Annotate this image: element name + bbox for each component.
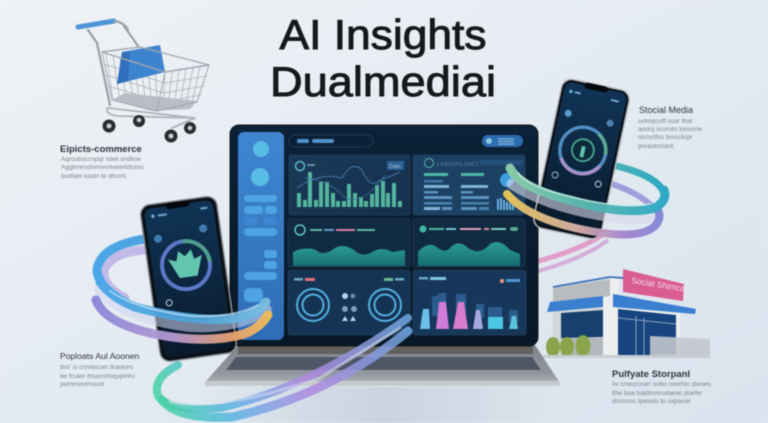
store sign [623, 269, 686, 301]
text block: private storefront: Pulfyate Storpanl [612, 369, 690, 380]
store lower wall [553, 305, 603, 356]
store upper wall [553, 279, 610, 304]
mini bars [497, 198, 514, 210]
title: AI Insights [280, 11, 486, 58]
text block: private storefront: dnsoonc tpeoslo to oxpaoar. [612, 398, 692, 405]
pink ribbon tail behind right phone [535, 234, 604, 262]
ribbon: back of right ring [612, 165, 665, 215]
panel: gauges [288, 270, 410, 335]
text block: e-commerce: Agginnirsdsmonnivwertdciosi [61, 164, 143, 171]
cart basket floor [112, 93, 197, 111]
cart load: blue folder [117, 45, 165, 84]
icon: storefront [543, 269, 710, 358]
text block: social media: uoknpcoff soar that [638, 118, 692, 125]
cart chassis [107, 108, 195, 128]
ribbon: right phone ring [507, 168, 665, 235]
text block: social media: Stocial Media [639, 105, 693, 115]
panel: bar and line chart [289, 155, 410, 215]
text block: e-commerce: Aqroobsccnpqr rdeit ondtioe [61, 156, 141, 163]
laptop [205, 125, 560, 386]
panel: data list: 1 KASSTS CRCT [436, 162, 480, 168]
laptop hinge [238, 345, 533, 354]
cart handle [78, 21, 114, 27]
right phone [532, 78, 631, 241]
panel: area chart right [413, 219, 525, 267]
title: Dualmediai [270, 58, 496, 105]
cart basket wires [104, 54, 207, 110]
top search bar [289, 135, 373, 147]
text block: social media: aoorq ocoroto tonoone [638, 126, 703, 133]
icon: shopping cart [78, 21, 209, 142]
laptop lip [205, 381, 560, 386]
store left awning [547, 296, 603, 312]
text block: e-commerce: bodtaei eastn te dtsont. [61, 173, 128, 180]
store right awning [613, 294, 696, 314]
laptop base [205, 345, 560, 386]
text block: popular AI [60, 351, 140, 388]
ribbon: sweep across laptop [157, 318, 408, 417]
text block: social media: preastoctarit. [638, 143, 675, 150]
top right profile pill [482, 135, 523, 147]
store sign: Sociat Shimca [631, 275, 686, 294]
store left lower panel [561, 338, 603, 355]
phone gauge [159, 238, 213, 292]
ribbon: left phone ring [96, 282, 268, 339]
phone ring gauge [556, 123, 610, 177]
panel: area chart left [288, 219, 410, 267]
text block: e-commerce: Eipicts-commerce [60, 144, 142, 155]
panel: bar and line chart: Dato [389, 164, 401, 170]
phone mascot icon [167, 248, 205, 279]
left phone [139, 195, 238, 363]
panel: pink and cyan bars [413, 270, 526, 335]
sidebar [238, 132, 284, 340]
text block: social media [638, 105, 703, 150]
trend lines [297, 166, 400, 188]
pink ribbon tail, second strand [535, 240, 608, 272]
store white column [603, 278, 618, 357]
text block: popular AI: Poploats Aul Aoonen [60, 351, 140, 361]
text block: private storefront: Iiv cmecrorarr oobo noorhic dieoes. [612, 381, 712, 388]
text block: private storefront: lthe baa baldtmnrudaeac plarfer [612, 390, 703, 397]
phone center icon [570, 137, 596, 163]
text block: social media: oicrorthis bmsclicpr [638, 134, 694, 141]
text block: popular AI: peirtesoornsuot [60, 381, 104, 388]
text block: popular AI: be frsaer ihsacortoqupinhc [60, 373, 136, 380]
laptop screen [230, 125, 538, 346]
laptop keyboard [226, 357, 541, 370]
store door frames [618, 316, 676, 356]
store door and right window [618, 309, 676, 356]
cart rim [102, 47, 209, 72]
text block: e-commerce [60, 144, 143, 180]
store fence [650, 336, 710, 357]
text block: private storefront [612, 369, 712, 405]
text block: popular AI: bisi' si cmvtecuer liraotors [60, 364, 133, 371]
store ground [543, 355, 710, 358]
floor reflection [205, 387, 565, 423]
cart wheels [102, 115, 196, 142]
bars [297, 172, 402, 207]
store shrubs [546, 335, 590, 357]
gauge right [369, 289, 401, 321]
cart frame [88, 26, 138, 105]
gauge left [297, 289, 329, 321]
store left window [561, 310, 603, 338]
store roof line [553, 277, 623, 287]
panel: data list [413, 155, 525, 215]
title [270, 11, 496, 105]
store right wall [618, 300, 680, 356]
ribbon: back of left ring [97, 239, 145, 298]
